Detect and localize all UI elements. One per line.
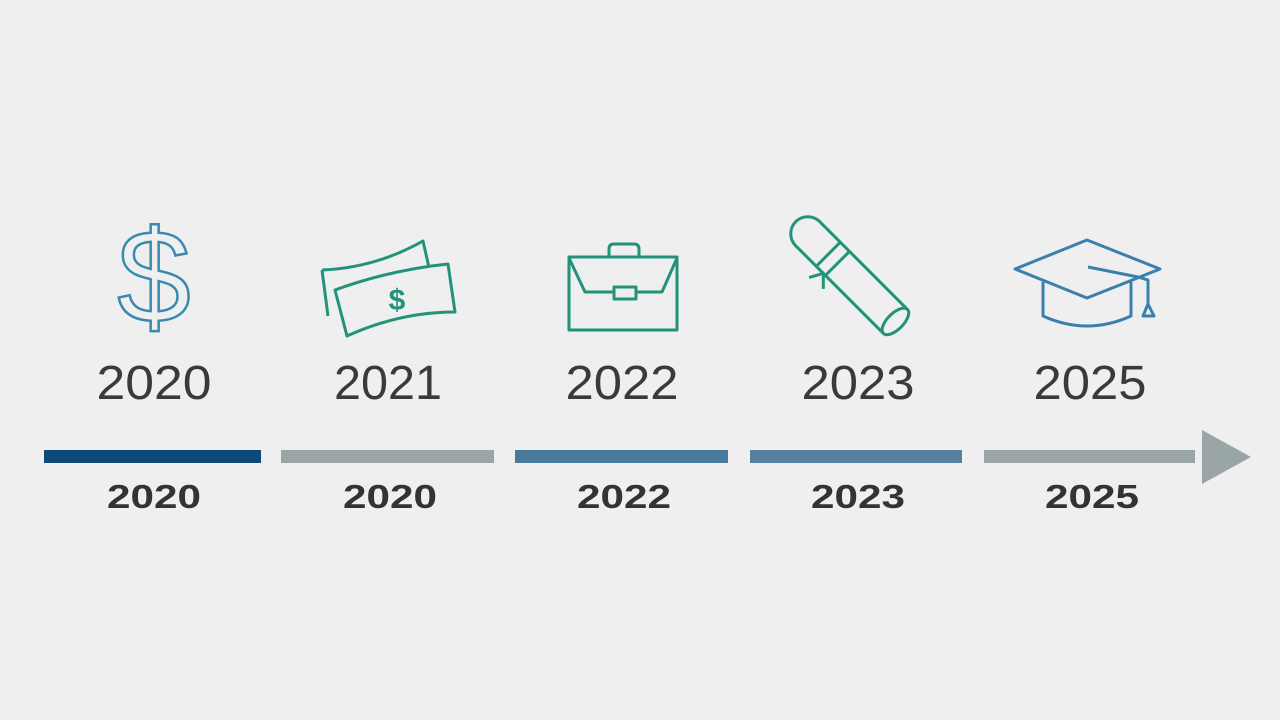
bold bar labels: 2020	[343, 478, 437, 515]
bold bar labels: 2025	[1045, 478, 1139, 515]
year labels: 2022	[566, 357, 678, 410]
year labels: 2020	[96, 357, 212, 410]
timeline bars	[44, 450, 1195, 463]
bold bar labels: 2022	[577, 478, 671, 515]
year labels: 2021	[334, 357, 442, 410]
icon: dollar sign: $	[117, 203, 191, 350]
icon: money bills	[322, 241, 455, 336]
year labels	[96, 357, 1146, 410]
year labels: 2023	[802, 357, 914, 410]
bold bar labels: 2023	[811, 478, 905, 515]
arrow head	[1202, 430, 1251, 484]
year labels: 2025	[1034, 357, 1146, 410]
icon: graduation cap	[1015, 240, 1160, 326]
icon: money bills: $	[389, 284, 406, 317]
icon: briefcase	[569, 244, 677, 330]
icon: diploma scroll	[775, 210, 913, 348]
bold bar labels: 2020	[107, 478, 201, 515]
bold bar labels	[107, 478, 1139, 515]
